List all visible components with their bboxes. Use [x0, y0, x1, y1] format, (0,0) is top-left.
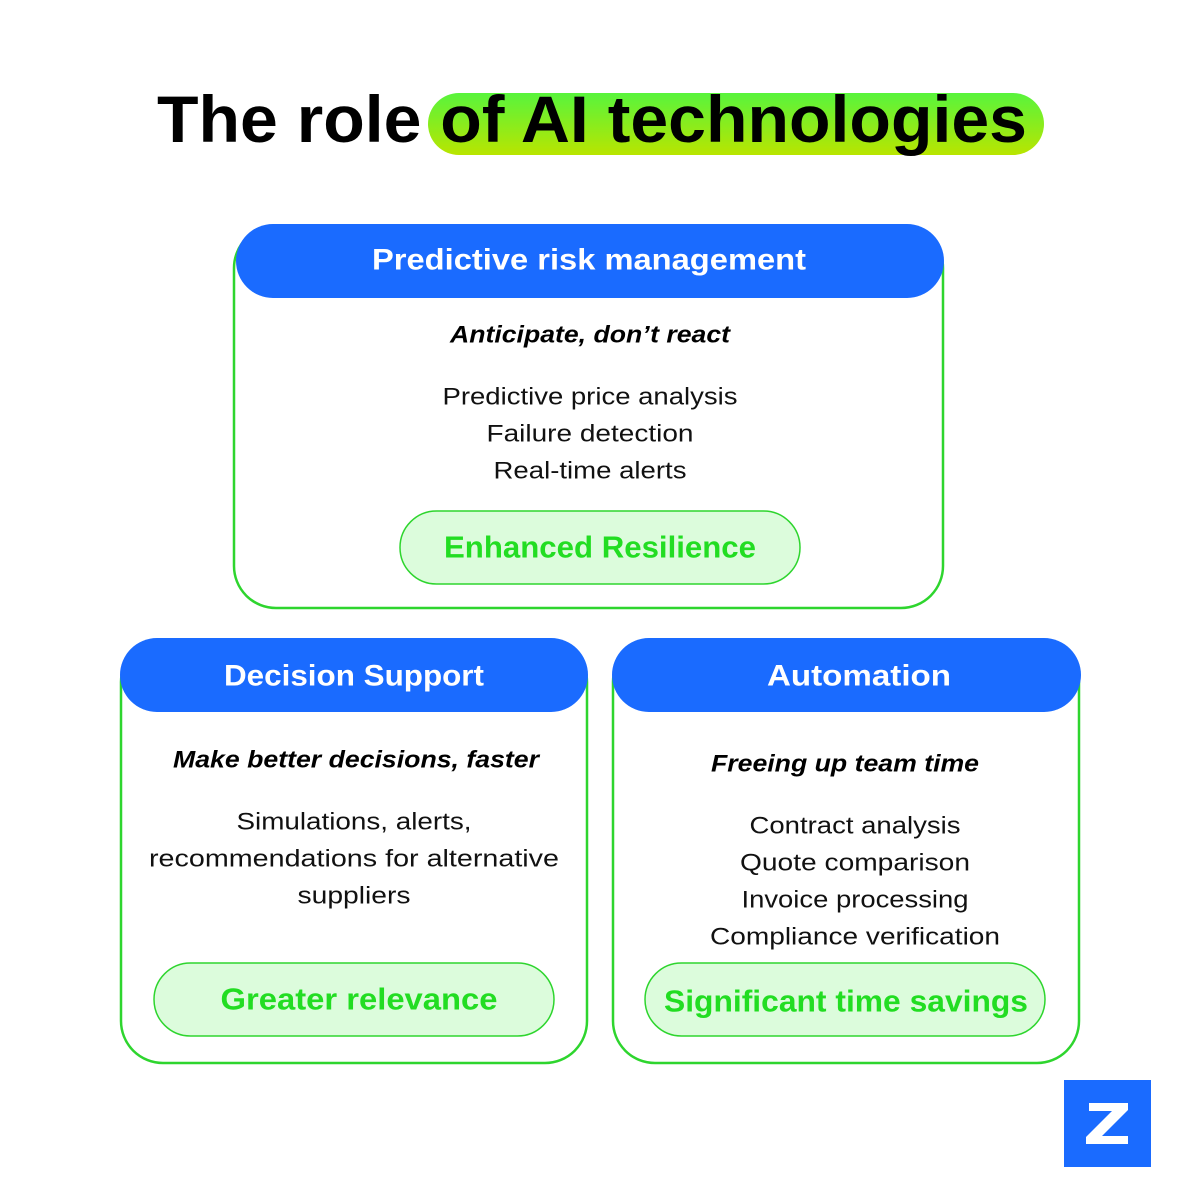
list: Real-time alerts: [494, 458, 686, 484]
pill: enhanced resilience: Enhanced Resilience: [444, 530, 756, 564]
header: automation: Automation: [767, 660, 951, 692]
list: Failure detection: [486, 420, 694, 448]
pill: greater relevance: Greater relevance: [220, 982, 498, 1016]
icon: Z logo: [1064, 1080, 1151, 1167]
list: Contract analysis: [750, 812, 960, 840]
header: automation: [612, 638, 1081, 712]
tagline: Anticipate, don’t react: [449, 322, 731, 348]
list: [710, 812, 1000, 950]
pill: significant time savings: [645, 963, 1045, 1036]
list: Predictive price analysis: [442, 384, 738, 410]
text block: recommendations for alternative: [149, 846, 559, 872]
text block: Simulations, alerts,: [236, 808, 472, 836]
header: decision support: Decision Support: [224, 660, 484, 692]
panel: automation: [612, 638, 1081, 1063]
header: predictive risk management: [236, 224, 944, 298]
header: predictive risk management: Predictive risk management: [372, 244, 806, 276]
tagline: Make better decisions, faster: [173, 746, 541, 774]
tagline: Freeing up team time: [711, 750, 979, 778]
pill: enhanced resilience: [400, 511, 800, 584]
title: The role of AI technologies: [157, 82, 1027, 156]
text block: suppliers: [298, 882, 410, 910]
list: Quote comparison: [740, 850, 970, 876]
pill: significant time savings: Significant time savings: [664, 984, 1028, 1018]
list: Compliance verification: [710, 924, 1000, 950]
text block: [149, 808, 559, 910]
list: [442, 384, 738, 484]
pill: greater relevance: [154, 963, 554, 1036]
panel: decision support: [120, 638, 588, 1063]
list: Invoice processing: [742, 886, 968, 914]
header: decision support: [120, 638, 588, 712]
panel: predictive risk management: [234, 224, 944, 608]
